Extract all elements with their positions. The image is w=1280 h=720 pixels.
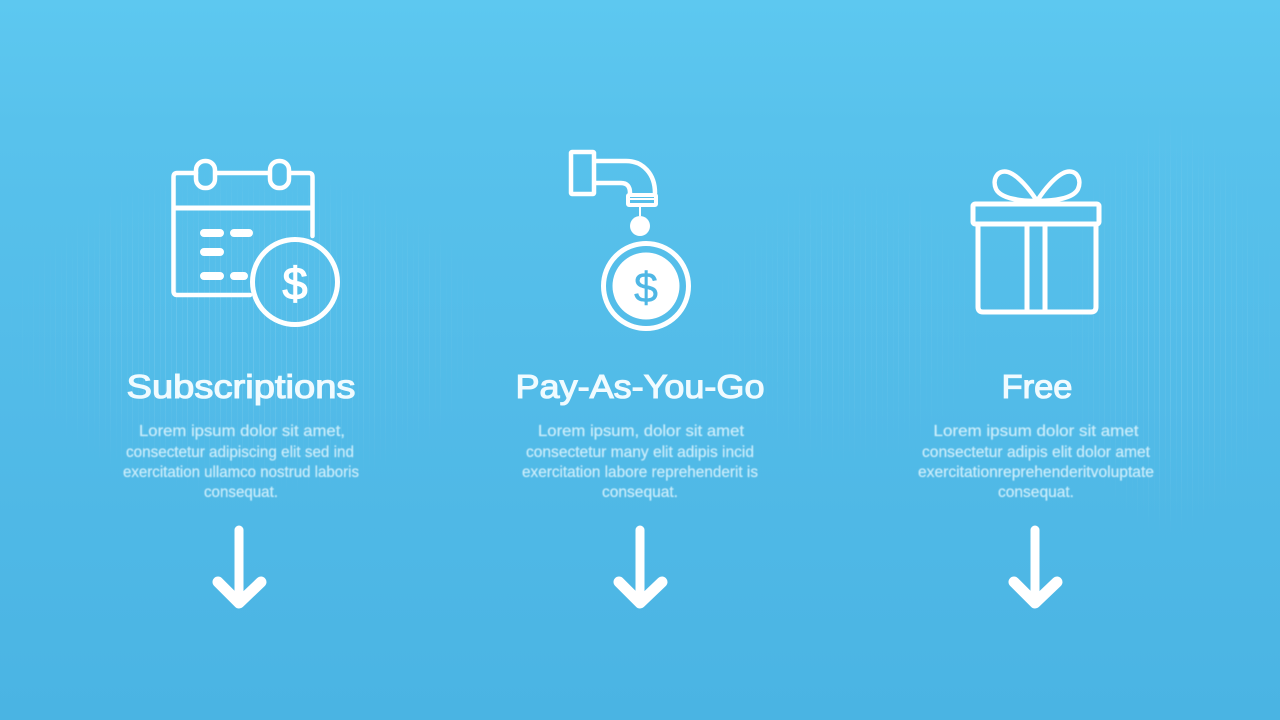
icon: faucet dripping a dollar coin: $ bbox=[634, 264, 658, 312]
text block: pay-as-you-go description: consequat. bbox=[602, 484, 678, 501]
arrow: subscriptions down bbox=[218, 530, 261, 603]
text block: subscriptions description: consequat. bbox=[204, 484, 278, 501]
text block: pay-as-you-go description: consectetur many elit adipis incid bbox=[526, 444, 754, 461]
icon: faucet dripping a dollar coin bbox=[571, 152, 688, 328]
text block: free description: Lorem ipsum dolor sit amet bbox=[934, 423, 1139, 440]
icon: calendar with dollar coin bbox=[174, 161, 338, 324]
heading: Free: Free bbox=[1002, 368, 1072, 405]
panel: pay-as-you-go bbox=[516, 152, 764, 603]
arrow: pay-as-you-go down bbox=[619, 530, 662, 603]
text block: free description: consequat. bbox=[998, 484, 1074, 501]
text block: subscriptions description: consectetur adipiscing elit sed ind bbox=[126, 444, 354, 461]
text block: subscriptions description bbox=[123, 423, 359, 501]
heading: Subscriptions: Subscriptions bbox=[126, 368, 356, 405]
text block: free description bbox=[918, 423, 1154, 501]
icon: calendar with dollar coin: $ bbox=[282, 258, 308, 309]
text block: free description: consectetur adipis elit dolor amet bbox=[922, 444, 1151, 461]
heading: Pay-As-You-Go: Pay-As-You-Go bbox=[516, 368, 764, 405]
text block: subscriptions description: exercitation ullamco nostrud laboris bbox=[123, 464, 359, 481]
text block: free description: exercitationreprehenderitvoluptate bbox=[918, 464, 1154, 481]
arrow: free down bbox=[1014, 530, 1057, 603]
text block: subscriptions description: Lorem ipsum dolor sit amet, bbox=[139, 423, 345, 440]
text block: pay-as-you-go description: exercitation labore reprehenderit is bbox=[522, 464, 758, 481]
panel: free bbox=[918, 171, 1154, 603]
icon: gift box bbox=[973, 171, 1099, 312]
text block: pay-as-you-go description bbox=[522, 423, 758, 501]
text block: pay-as-you-go description: Lorem ipsum, dolor sit amet bbox=[538, 423, 745, 440]
panel: subscriptions bbox=[123, 161, 359, 603]
